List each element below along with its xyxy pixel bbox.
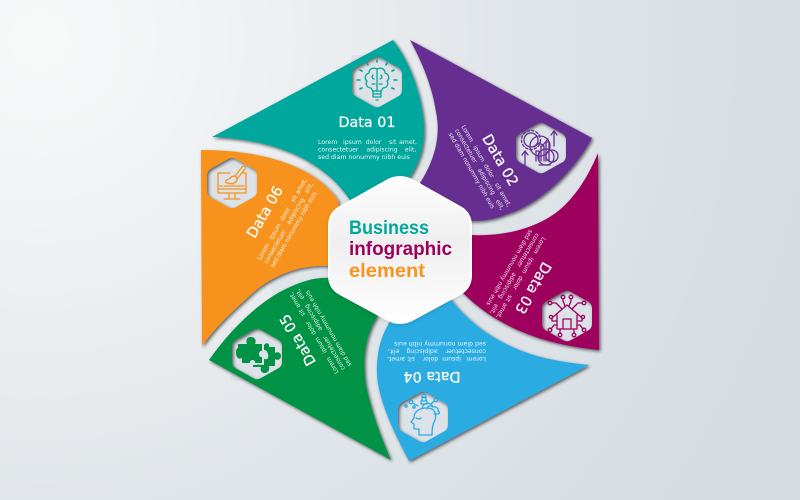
text block: ipsum [343,139,362,146]
text block: dolor [422,355,438,362]
icon hole backings [206,55,593,444]
text block: ipsum [442,355,461,362]
text block: adipiscing [366,146,398,154]
text block: sed diam nonummy nibh euis [304,289,353,367]
text block: elit, [303,181,315,195]
text block: amet, [387,355,405,362]
text block: amet, [294,177,309,195]
text block: sit [389,139,397,146]
heading: Data 03 [511,259,554,316]
text block: elit, [388,348,399,354]
text block: dolor [510,274,524,291]
text block: amet, [288,291,302,309]
magenta segment [440,153,599,350]
text block: sit [297,307,307,317]
icon: puzzle pieces [236,337,281,373]
text block: dolor [304,319,318,336]
text block: consectetuer [515,232,540,269]
panel: Data 02 [410,40,592,221]
icon: light bulb brain [357,60,397,100]
title: infographic [349,239,452,260]
text block: adipiscing [497,271,518,300]
title: element [349,261,426,282]
heading: Data 04 [404,368,460,384]
panel: Data 01 [212,40,424,200]
icon: monitor and paint brush [218,166,246,199]
text block: consectetuer [453,128,479,165]
text block: sit [407,355,415,362]
icon: smart home circuit [548,295,586,337]
text block: consectetuer [321,334,347,371]
text block: consectetuer [445,348,486,354]
text block: dolor [482,163,496,180]
text block: ipsum [268,222,283,241]
text block: ipsum [520,256,535,275]
text block: amet, [399,139,417,146]
text block [447,124,512,216]
text block: sed diam nonummy nibh euis [484,228,534,307]
panel: Data 03 [440,153,599,350]
purple segment [410,40,592,221]
text block: elit, [405,146,416,154]
text block: sit [503,293,513,304]
text block: Lorem [256,242,272,261]
text block: elit, [294,287,306,301]
text block: amet, [498,190,512,208]
text block: adipiscing [476,167,497,196]
text block: adipiscing [285,197,306,226]
text block: adipiscing [303,303,324,332]
text block [256,177,322,269]
text block: sit [493,182,503,192]
text block: amet, [494,302,509,320]
heading: Data 01 [338,115,396,131]
panel: Data 06 [201,150,345,346]
icon: gears and growth chart [522,130,558,166]
text block: elit, [488,302,500,316]
text block: dolor [366,139,382,146]
text block: sed diam nonummy nibh euis [269,190,319,269]
icon: head with ideas [405,394,439,435]
text block: sed diam nonummy nibh euis [318,154,410,161]
text block: sed diam nonummy nibh euis [447,132,496,210]
text block: Lorem [467,355,486,362]
text block [318,139,417,161]
title [349,218,452,282]
channel backing [262,130,560,410]
text block: ipsum [471,144,486,163]
blue segment [377,298,589,461]
text block [481,228,547,320]
teal segment [212,40,424,200]
heading: Data 05 [277,311,320,368]
heading: Data 06 [244,184,287,241]
text block: Lorem [531,236,547,255]
text block: consectetuer [263,228,288,265]
center hexagon [329,177,471,323]
green segment [209,278,391,460]
text block: Lorem [318,139,337,146]
text block: adipiscing [406,348,438,354]
heading: Data 02 [478,132,521,189]
text block: dolor [279,206,293,223]
text block: sed diam nonummy nibh euis [394,340,486,347]
text block: Lorem [325,355,340,375]
text block: consectetuer [318,146,359,154]
text block: elit, [494,198,506,212]
title: Business [349,218,429,239]
panel: Data 04 [377,298,589,461]
panel: Data 05 [209,278,391,460]
text block [387,340,486,362]
text block: ipsum [314,336,329,355]
orange segment [201,150,345,346]
text block: Lorem [460,124,475,144]
text block: sit [290,193,300,204]
text block [288,283,353,375]
